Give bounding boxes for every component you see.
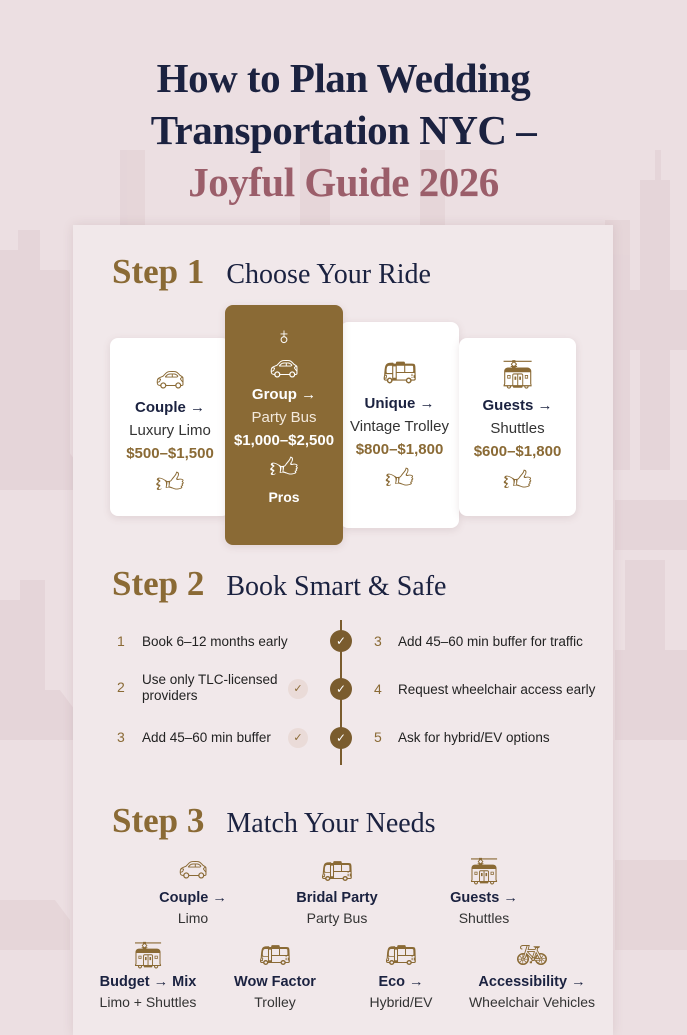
checklist: Add 45–60 min buffer for traffic — [398, 634, 583, 649]
card: guests: Guests → — [482, 397, 553, 414]
card: guests: $600–$1,800 — [474, 443, 561, 460]
checklist: 5 — [374, 729, 382, 745]
needs grid: 🚌︎ — [320, 856, 354, 886]
card: unique — [340, 322, 459, 528]
card: couple: 👍︎ — [155, 467, 185, 498]
step 3 heading: Step 3 Match Your Needs — [112, 801, 436, 840]
card: unique: Vintage Trolley — [350, 418, 449, 435]
icon: car: 🚗︎ — [155, 367, 185, 394]
needs grid: Wheelchair Vehicles — [469, 994, 595, 1010]
checklist: providers — [142, 688, 198, 703]
checklist: ✓ — [336, 682, 346, 696]
needs grid: Guests → — [450, 890, 518, 906]
card: couple — [110, 338, 230, 516]
card: unique: 🚌︎ — [382, 357, 417, 388]
card: unique: 👍︎ — [385, 463, 414, 494]
needs grid: Couple → — [159, 890, 227, 906]
card: group (highlighted): Pros — [268, 489, 300, 505]
title — [151, 55, 538, 205]
needs grid: 🚋︎ — [131, 940, 164, 970]
card: couple: $500–$1,500 — [126, 445, 214, 462]
needs grid: Limo — [178, 910, 208, 926]
needs grid: Bridal Party — [296, 890, 378, 906]
step 1 heading: Step 1 Choose Your Ride — [112, 252, 431, 291]
card: couple: Couple → — [135, 399, 205, 416]
checklist: 2 — [117, 679, 125, 695]
needs grid: Eco → — [378, 974, 424, 990]
needs grid: 🚌︎ — [384, 940, 418, 970]
card: group (highlighted): 👍︎ — [269, 452, 299, 483]
checklist: ✓ — [293, 732, 303, 744]
checklist: 3 — [374, 633, 382, 649]
needs grid: Wow Factor — [234, 974, 316, 990]
needs grid: 🚗︎ — [178, 857, 208, 884]
card: guests: 👍︎ — [503, 465, 532, 496]
card: group (highlighted) — [225, 305, 343, 545]
needs grid: Accessibility → — [478, 974, 586, 990]
checklist: 4 — [374, 681, 382, 697]
needs grid: Shuttles — [459, 910, 509, 926]
needs grid: Hybrid/EV — [369, 994, 433, 1010]
checklist: ✓ — [336, 731, 346, 745]
card: couple: Luxury Limo — [129, 422, 211, 439]
card: group (highlighted): ♁ — [275, 323, 293, 350]
main panel — [73, 225, 613, 1035]
checklist: 1 — [117, 633, 125, 649]
card: group (highlighted): 🚗︎ — [269, 356, 299, 383]
needs grid: Limo + Shuttles — [100, 994, 196, 1010]
title: Transportation NYC – — [151, 107, 536, 153]
card: group (highlighted): $1,000–$2,500 — [234, 432, 334, 449]
needs grid: Trolley — [254, 994, 296, 1010]
checklist: Ask for hybrid/EV options — [398, 730, 550, 745]
card: unique: Unique → — [364, 395, 434, 412]
needs grid: 🚌︎ — [258, 940, 292, 970]
checklist: ✓ — [293, 683, 303, 695]
needs grid: Party Bus — [307, 910, 367, 926]
checklist: Request wheelchair access early — [398, 682, 595, 697]
checklist: ✓ — [336, 634, 346, 648]
checklist: Use only TLC-licensed — [142, 672, 278, 687]
card: unique: $800–$1,800 — [356, 441, 443, 458]
step 2 heading: Step 2 Book Smart & Safe — [112, 564, 446, 603]
checklist: 3 — [117, 729, 125, 745]
checklist: Book 6–12 months early — [142, 634, 288, 649]
card: group (highlighted): Group → — [252, 386, 316, 403]
card: guests: Shuttles — [490, 420, 545, 437]
needs grid: 🚋︎ — [467, 856, 500, 886]
card: guests: 🚋︎ — [500, 359, 535, 390]
needs grid: 🚲︎ — [515, 940, 548, 970]
title: How to Plan Wedding — [157, 55, 530, 101]
card: group (highlighted): Party Bus — [251, 409, 317, 426]
checklist: Add 45–60 min buffer — [142, 730, 271, 745]
checklist — [117, 620, 596, 765]
title: Joyful Guide 2026 — [188, 159, 499, 205]
needs grid — [100, 856, 595, 1010]
needs grid: Budget → Mix — [100, 974, 196, 990]
card: guests — [459, 338, 576, 516]
